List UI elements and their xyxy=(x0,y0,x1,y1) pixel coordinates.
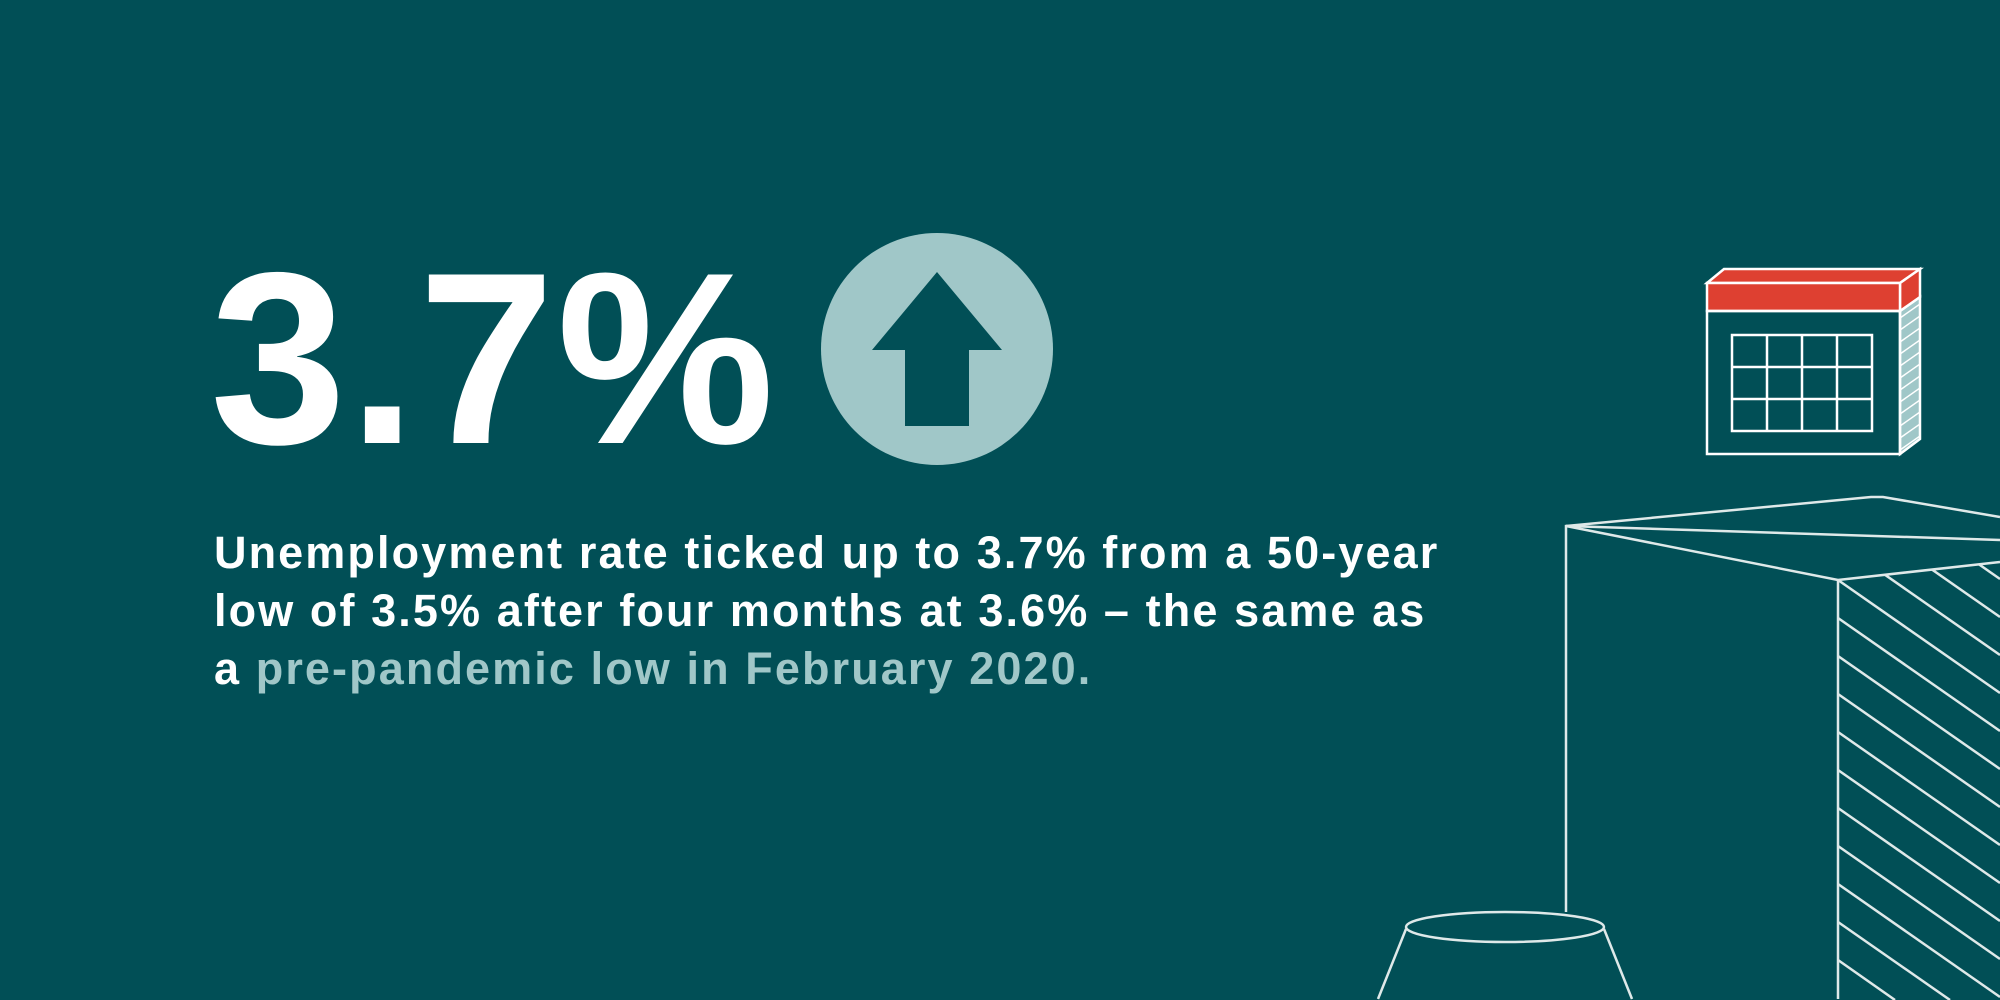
illustration: calendar on box xyxy=(1376,266,2000,1000)
description text xyxy=(214,527,1439,694)
box pedestal xyxy=(1564,496,2000,1000)
icon: up arrow circle xyxy=(821,233,1053,465)
headline number: 3.7% xyxy=(210,221,776,495)
icon: calendar xyxy=(1707,269,1920,454)
description text: Unemployment rate ticked up to 3.7% from a 50-year xyxy=(214,527,1439,578)
description text: low of 3.5% after four months at 3.6% – the same as xyxy=(214,585,1426,636)
cylinder pedestal xyxy=(1378,912,1632,999)
description text: a pre-pandemic low in February 2020. xyxy=(214,643,1092,694)
